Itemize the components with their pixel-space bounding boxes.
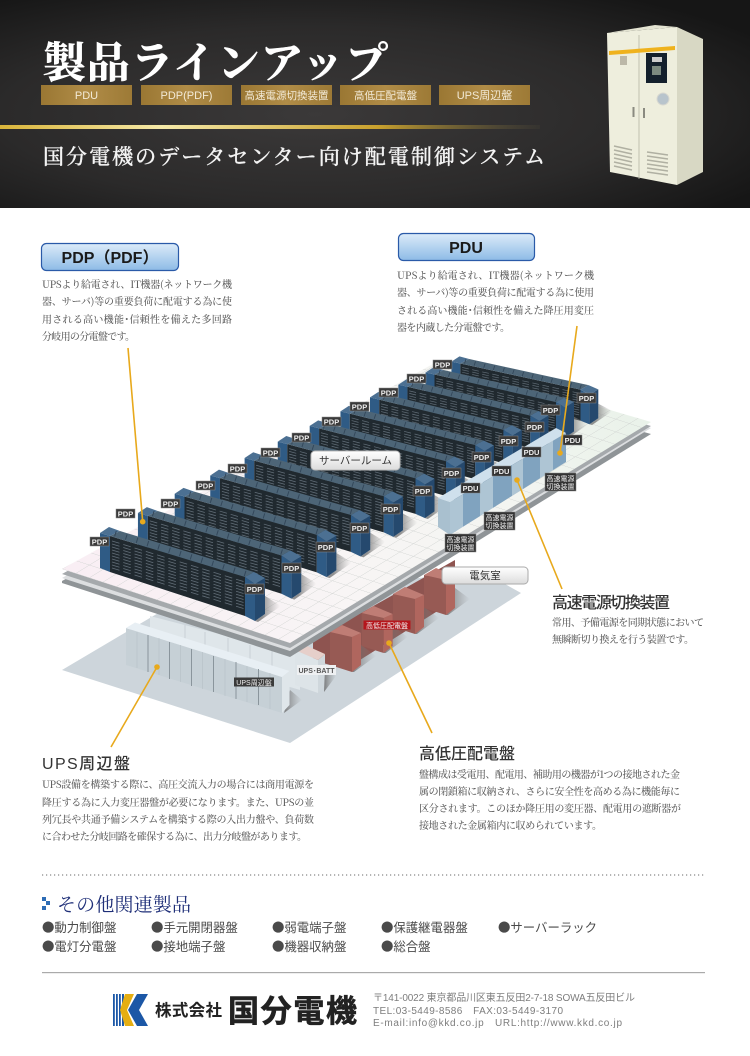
- UPS battery block: [295, 645, 336, 693]
- UPS peripheral cabinets: [126, 622, 302, 713]
- category badges: PDP(PDF): [161, 90, 212, 102]
- high-speed transfer switch cabinets: [438, 428, 566, 535]
- gold rule: [0, 125, 540, 129]
- company logo: 株式会社: [155, 1001, 222, 1020]
- PDU description: UPSより給電され、IT機器(ネットワーク機: [397, 267, 595, 282]
- PDP description: 器、サーバ)等の重要負荷に配電する為に使: [42, 293, 232, 308]
- other products list: ●電灯分電盤: [42, 937, 116, 955]
- category badges: [41, 85, 530, 105]
- UPS peripheral text block: 降圧する為に入力変圧器盤が必要になります。また、UPSの並: [42, 794, 314, 809]
- PDP heading button: PDP（PDF）: [62, 249, 158, 267]
- server rack rows: [100, 348, 613, 622]
- subtitle: 国分電機のデータセンター向け配電制御システム: [43, 141, 545, 171]
- PDU description: 器を内蔵した分電盤です。: [397, 319, 510, 334]
- category badges: 高速電源切換装置: [244, 89, 329, 102]
- transfer switch tags: 高速電源: [446, 535, 474, 544]
- other products list: ●サーバーラック: [498, 918, 597, 936]
- PDP tags: PDP: [352, 524, 367, 533]
- PDU tags: PDU: [565, 436, 580, 445]
- PDP description: [42, 276, 233, 343]
- PDP tags: PDP: [579, 394, 594, 403]
- PDP tags: PDP: [444, 469, 459, 478]
- other products list: ●弱電端子盤: [272, 918, 346, 936]
- UPS peripheral text block: UPS設備を構築する際に、高圧交流入力の場合には商用電源を: [42, 776, 314, 791]
- transfer switch text block: [552, 594, 704, 646]
- transfer switch tags: 切換装置: [486, 521, 514, 530]
- PDP heading button: [42, 244, 178, 270]
- UPS peripheral tag: [234, 678, 274, 687]
- lower floor: electrical room: [62, 570, 521, 743]
- PDP tags: PDP: [118, 510, 133, 518]
- other products list: ●総合盤: [381, 937, 431, 955]
- PDP tags: PDP: [284, 564, 299, 573]
- electrical room label: 電気室: [469, 569, 501, 582]
- transfer switch text block: 無瞬断切り換えを行う装置です。: [552, 631, 694, 646]
- PDP tags: PDP: [352, 402, 367, 412]
- logo mark: [113, 994, 148, 1026]
- PDU description: される高い機能･信頼性を備えた降圧用変圧: [397, 302, 594, 317]
- PDP tags: PDP: [247, 585, 262, 594]
- switchgear tag: 高低圧配電盤: [366, 621, 408, 630]
- contact details: TEL:03-5449-8586 FAX:03-5449-3170: [373, 1006, 563, 1017]
- UPS-BATT tag: [297, 665, 336, 675]
- UPS peripheral text block: に合わせた分岐回路を確保する為に、出力分岐盤があります。: [42, 828, 307, 843]
- leader line: switchgear: [386, 640, 432, 733]
- UPS-BATT tag: UPS･BATT: [298, 668, 335, 675]
- category badges: 高低圧配電盤: [354, 89, 417, 102]
- switchgear text block: 高低圧配電盤: [419, 745, 515, 763]
- transfer switch tags: 高速電源: [546, 474, 574, 483]
- other products list: ●接地端子盤: [151, 937, 225, 955]
- server room label: [311, 451, 400, 470]
- other products list: ●手元開閉器盤: [151, 918, 238, 936]
- company logo: [113, 994, 357, 1029]
- other products list: ●機器収納盤: [272, 937, 346, 955]
- PDP tags: PDP: [263, 448, 278, 458]
- transfer switch tags: 切換装置: [546, 482, 574, 491]
- transfer switch tags: 高速電源: [486, 513, 514, 522]
- PDU heading button: PDU: [449, 240, 483, 257]
- UPS peripheral text block: 列冗長や共通予備システムを構築する際の入出力盤や、負荷数: [42, 811, 314, 826]
- leader line: PDU: [557, 326, 577, 456]
- PDP tags: PDP: [435, 360, 450, 370]
- PDP tags: PDP: [230, 464, 245, 474]
- other products list: [42, 918, 597, 955]
- other products list: ●動力制御盤: [42, 918, 116, 936]
- leader line: UPS: [111, 664, 160, 747]
- PDP tags: PDP: [415, 487, 430, 496]
- leader line: PDP: [128, 348, 146, 524]
- PDP tags: [90, 360, 596, 594]
- server room label: サーバールーム: [319, 455, 392, 467]
- PDP tags: PDP: [318, 543, 333, 552]
- PDP tags: PDP: [474, 453, 489, 462]
- isometric data center diagram: [62, 326, 651, 747]
- product cabinet photo: [607, 25, 703, 185]
- PDU tags: PDU: [524, 448, 539, 457]
- PDU description: [397, 267, 595, 334]
- electrical room label: [442, 567, 528, 584]
- PDP tags: PDP: [163, 500, 178, 508]
- transfer switch tags: 切換装置: [446, 543, 474, 552]
- PDU tags: PDU: [494, 467, 509, 476]
- PDU tags: [461, 435, 582, 493]
- PDP description: 用される高い機能･信頼性を備えた多回路: [42, 311, 232, 326]
- PDP tags: PDP: [92, 538, 107, 546]
- leader line: transfer switch: [514, 477, 562, 589]
- icon: blue squares: [42, 897, 50, 910]
- PDU tags: PDU: [463, 484, 478, 493]
- UPS peripheral tag: UPS周辺盤: [236, 678, 272, 687]
- company logo: 国分電機: [228, 994, 357, 1029]
- transfer switch text block: 高速電源切換装置: [552, 594, 670, 612]
- switchgear text block: 属の閉鎖箱に収納され、さらに安全性を高める為に機能毎に: [419, 783, 680, 798]
- PDP tags: PDP: [409, 374, 424, 384]
- PDU heading button: [398, 234, 534, 260]
- transfer switch tags: [445, 473, 576, 552]
- other products heading: その他関連製品: [57, 890, 191, 917]
- switchgear text block: [419, 745, 681, 832]
- PDP tags: PDP: [198, 482, 213, 490]
- transfer switch text block: 常用、予備電源を同期状態において: [552, 614, 704, 629]
- PDP tags: PDP: [381, 388, 396, 398]
- PDP tags: PDP: [383, 505, 398, 514]
- high/low voltage switchgear blocks: [313, 560, 470, 672]
- contact details: [373, 991, 635, 1029]
- UPS peripheral text block: [42, 755, 314, 843]
- switchgear text block: 区分されます。このほか降圧用の変圧器、配電用の遮断器が: [419, 800, 681, 815]
- category badges: UPS周辺盤: [457, 89, 512, 102]
- back wall panels: [150, 616, 300, 690]
- contact details: E-mail:info@kkd.co.jp URL:http://www.kkd.co.jp: [373, 1018, 622, 1029]
- PDP tags: PDP: [324, 418, 339, 426]
- title: 製品ラインアップ: [43, 30, 388, 91]
- upper floor: server room: [62, 360, 651, 643]
- PDP tags: PDP: [501, 437, 516, 446]
- other products list: ●保護継電器盤: [381, 918, 468, 936]
- header band: [0, 0, 750, 208]
- switchgear tag: [364, 620, 410, 630]
- PDP description: UPSより給電され、IT機器(ネットワーク機: [42, 276, 233, 291]
- switchgear text block: 接地された金属箱内に収められています。: [419, 817, 602, 832]
- contact details: 〒141-0022 東京都品川区東五反田2-7-18 SOWA五反田ビル: [373, 991, 635, 1004]
- category badges: PDU: [75, 90, 98, 102]
- switchgear text block: 盤構成は受電用、配電用、補助用の機器が1つの接地された金: [419, 766, 680, 781]
- upper floor slab edge: [62, 364, 651, 657]
- PDP tags: PDP: [543, 406, 558, 415]
- PDP tags: PDP: [527, 423, 542, 432]
- UPS peripheral text block: UPS周辺盤: [42, 755, 130, 773]
- PDP tags: PDP: [294, 434, 309, 442]
- PDP description: 分岐用の分電盤です。: [42, 328, 135, 343]
- PDU description: 器、サーバ)等の重要負荷に配電する為に使用: [397, 284, 594, 299]
